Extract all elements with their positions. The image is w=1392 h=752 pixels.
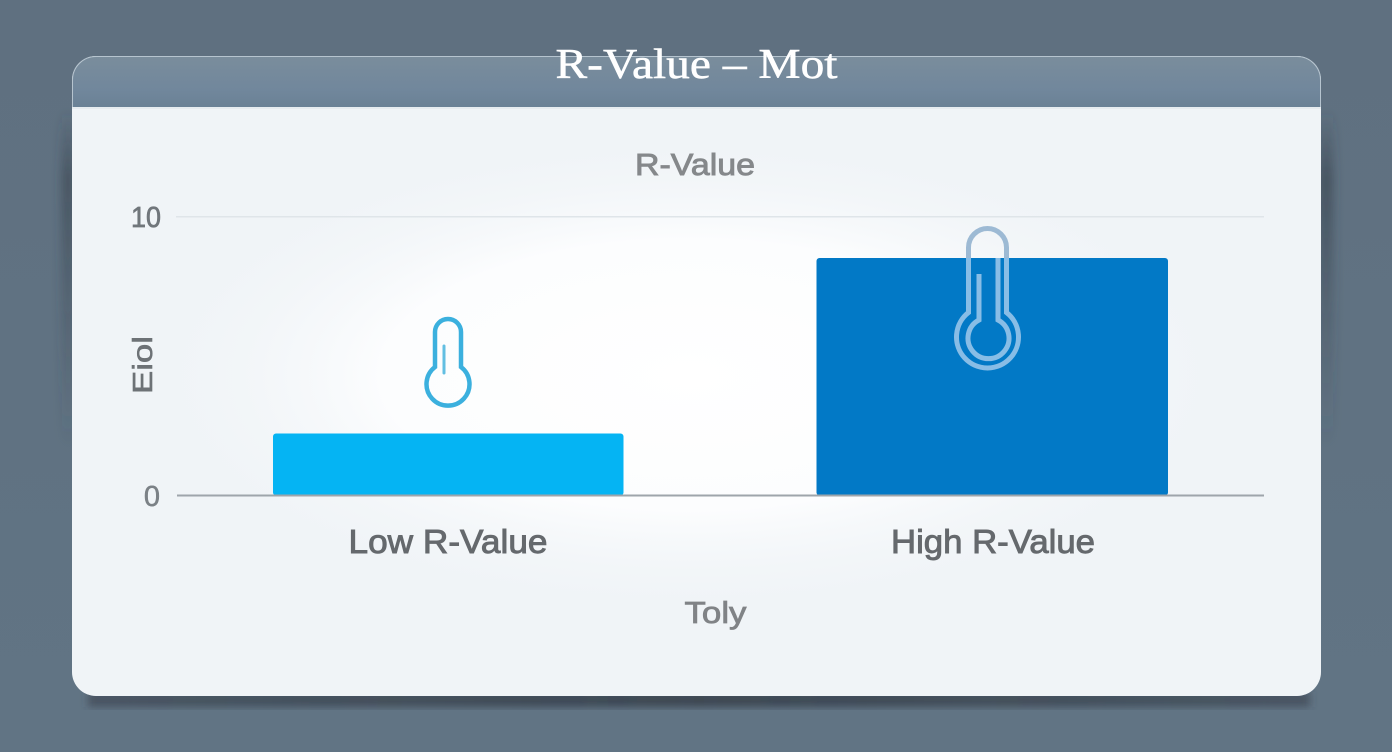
bar: high R-value	[816, 258, 1168, 496]
y axis label: 10: 10	[131, 202, 161, 234]
x axis line	[177, 494, 1264, 496]
icon: low thermometer	[426, 319, 469, 406]
y axis label: 0: 0	[144, 481, 160, 513]
category label: low: Low R-Value	[348, 523, 548, 560]
y axis title: Eiol	[127, 336, 158, 394]
chart heading: R-Value	[635, 147, 755, 182]
card shadow	[62, 110, 1333, 707]
icon: high thermometer	[956, 228, 1018, 368]
x axis title: Toly	[684, 595, 747, 630]
panel: chart card	[72, 56, 1321, 696]
panel glow	[336, 221, 918, 530]
bar: low R-value	[273, 434, 624, 496]
title: R-Value – Mot	[556, 42, 838, 88]
thermometer part over bar	[956, 258, 1018, 368]
thermometer part above bar	[968, 228, 1006, 258]
gridline at 10	[176, 216, 1264, 218]
header band	[72, 56, 1320, 108]
category label: high: High R-Value	[891, 523, 1095, 560]
